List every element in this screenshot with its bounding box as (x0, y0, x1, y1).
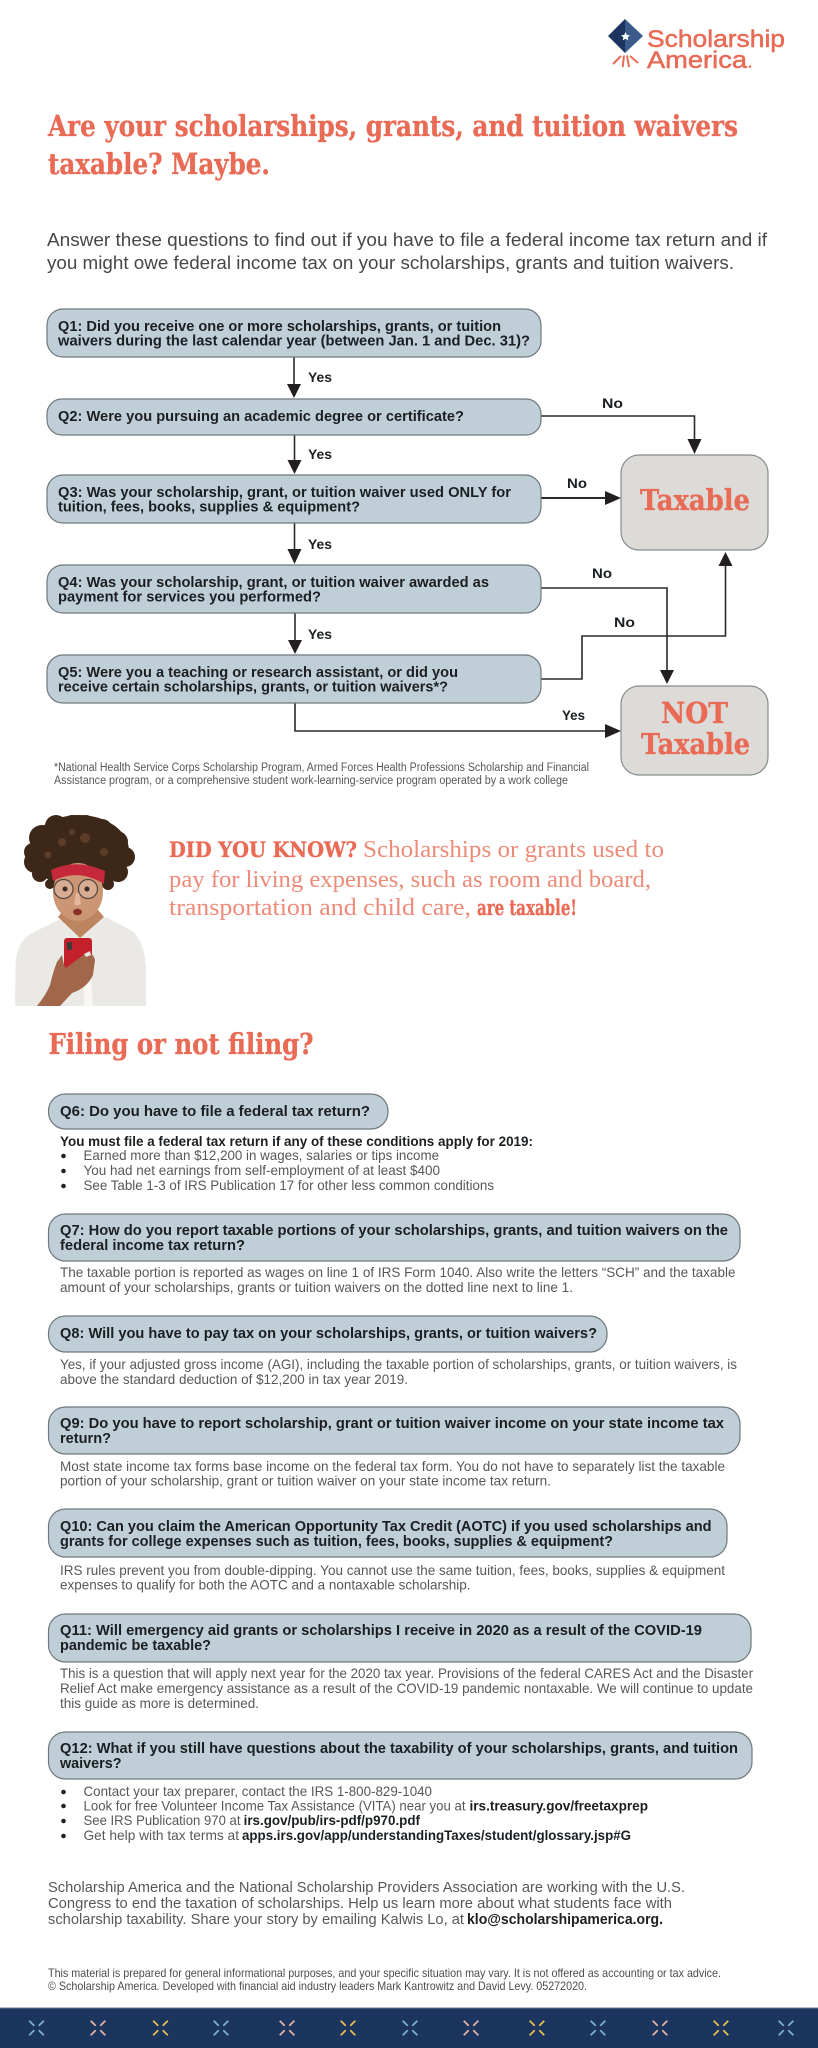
question pill Q10: grants for college expenses such as tuition, fees, books, supplies & equipment? (60, 1534, 613, 1550)
answer Q7: The taxable portion is reported as wages on line 1 of IRS Form 1040. Also write the letters “SCH” and the taxable (60, 1265, 736, 1280)
closing text block (48, 1879, 685, 1928)
result box: NOT Taxable: Taxable (641, 727, 750, 761)
disclaimer (48, 1966, 721, 1993)
question box Q4: payment for services you performed? (58, 590, 321, 606)
closing text block: scholarship taxability. Share your story by emailing Kalwis Lo, at (48, 1911, 465, 1928)
footnote: Assistance program, or a comprehensive student work-learning-service program operated by a work college (54, 775, 568, 787)
intro text: you might owe federal income tax on your scholarships, grants and tuition waivers. (47, 252, 734, 273)
neck (58, 910, 104, 938)
question pill Q7: federal income tax return? (60, 1238, 245, 1254)
panel: Q7 (48, 1214, 740, 1295)
connector: Q2 no to Taxable: No (602, 395, 623, 411)
panel: Q12 (48, 1732, 752, 1843)
title: taxable? Maybe. (48, 147, 270, 181)
answer Q7 (60, 1265, 736, 1295)
answer Q12 list: apps.irs.gov/app/understandingTaxes/student/glossary.jsp#G (242, 1828, 631, 1843)
question pill Q12: Q12: What if you still have questions about the taxability of your scholarships, grants, and tuition (60, 1741, 738, 1757)
question box Q5: receive certain scholarships, grants, or tuition waivers*? (58, 680, 448, 696)
disclaimer: © Scholarship America. Developed with financial aid industry leaders Mark Kantrowitz and David Levy. 05272020. (48, 1979, 587, 1993)
callout: did you know: transportation and child care, (169, 895, 471, 921)
answer Q11: This is a question that will apply next year for the 2020 tax year. Provisions of the federal CARES Act and the Disaster (60, 1666, 753, 1681)
answer Q6 (60, 1134, 533, 1193)
result box: Taxable (621, 455, 768, 550)
glasses (54, 880, 98, 898)
question pill Q9: Q9: Do you have to report scholarship, grant or tuition waiver income on your state income tax (60, 1416, 724, 1432)
connector: Q4 no to NOT Taxable: No (592, 565, 612, 581)
connector: Q1 yes to Q2: Yes (308, 369, 332, 385)
panel: Q11 (48, 1614, 753, 1711)
answer Q12 list (61, 1784, 648, 1843)
answer Q9: Most state income tax forms base income on the federal tax form. You do not have to separately list the taxable (60, 1459, 725, 1474)
connector: Q5 yes to NOT Taxable: Yes (562, 707, 585, 723)
hand (37, 953, 95, 1006)
panel: Q6 (48, 1094, 533, 1193)
hair (24, 815, 135, 890)
question pill Q6 (48, 1094, 388, 1129)
connector: Q3 no to Taxable: No (567, 475, 587, 491)
answer Q6: You had net earnings from self-employment of at least $400 (84, 1163, 440, 1178)
result box: Taxable: Taxable (640, 483, 750, 517)
question pill Q10 (48, 1509, 727, 1557)
answer Q7: amount of your scholarships, grants or tuition waivers on the dotted line next to line 1. (60, 1280, 573, 1295)
panel: Q9 (48, 1407, 740, 1488)
connector: Q4 yes to Q5 (288, 613, 332, 654)
logo: Scholarship America (608, 19, 785, 74)
connector: Q4 no to NOT Taxable (541, 565, 674, 684)
answer Q9: portion of your scholarship, grant or tuition waiver on your state income tax return. (60, 1474, 551, 1488)
answer Q6: Earned more than $12,200 in wages, salaries or tips income (84, 1148, 439, 1163)
answer Q11 (60, 1666, 753, 1711)
question pill Q10: Q10: Can you claim the American Opportunity Tax Credit (AOTC) if you used scholarships and (60, 1519, 712, 1535)
answer Q10: IRS rules prevent you from double-dipping. You cannot use the same tuition, fees, books, supplies & equipment (60, 1563, 725, 1578)
result box: NOT Taxable (621, 686, 768, 775)
footnote: *National Health Service Corps Scholarship Program, Armed Forces Health Professions Scholarship and Financial (54, 762, 589, 774)
question pill Q7: Q7: How do you report taxable portions of your scholarships, grants, and tuition waivers on the (60, 1223, 728, 1239)
answer Q12 list: Contact your tax preparer, contact the IRS 1-800-829-1040 (84, 1784, 432, 1799)
callout: did you know: are taxable! (477, 895, 577, 920)
question box Q4: Q4: Was your scholarship, grant, or tuition waiver awarded as (58, 575, 489, 591)
question pill Q8: Q8: Will you have to pay tax on your scholarships, grants, or tuition waivers? (60, 1326, 597, 1342)
question pill Q7 (48, 1214, 740, 1261)
title (47, 109, 738, 181)
question box Q3: tuition, fees, books, supplies & equipment? (58, 500, 360, 516)
answer Q12 list: Get help with tax terms at (84, 1828, 239, 1843)
question box Q3: Q3: Was your scholarship, grant, or tuition waiver used ONLY for (58, 485, 511, 501)
answer Q10: expenses to qualify for both the AOTC and a nontaxable scholarship. (60, 1578, 470, 1592)
question box Q1: waivers during the last calendar year (between Jan. 1 and Dec. 31)? (57, 334, 530, 350)
question box Q4 (47, 565, 541, 613)
logo: Scholarship America: Scholarship (647, 26, 785, 53)
answer Q12 list: irs.gov/pub/irs-pdf/p970.pdf (244, 1813, 420, 1828)
connector: Q3 yes to Q4 (288, 523, 332, 564)
result box: NOT Taxable: NOT (661, 696, 728, 730)
answer Q8 (60, 1357, 737, 1387)
question pill Q9: return? (60, 1431, 111, 1447)
heading: Filing or not filing: Filing or not filing? (48, 1027, 314, 1061)
phone (64, 938, 92, 970)
connector: Q5 no to Taxable: No (614, 614, 635, 630)
answer Q8: above the standard deduction of $12,200 in tax year 2019. (60, 1372, 408, 1387)
headband (51, 864, 105, 884)
connector: Q1 yes to Q2 (287, 357, 332, 398)
question pill Q11 (48, 1614, 751, 1662)
question pill Q11: pandemic be taxable? (60, 1638, 211, 1654)
answer Q12 list: Look for free Volunteer Income Tax Assistance (VITA) near you at (84, 1798, 466, 1814)
intro text: Answer these questions to find out if you have to file a federal income tax return and if (47, 229, 768, 250)
answer Q9 (60, 1459, 725, 1488)
connector: Q5 no to Taxable (541, 552, 732, 679)
footnote (54, 762, 589, 787)
connector: Q4 yes to Q5: Yes (308, 626, 332, 642)
connector: Q3 no to Taxable (541, 475, 621, 505)
question box Q1 (47, 309, 541, 357)
closing text block: Scholarship America and the National Scholarship Providers Association are working with the U.S. (48, 1879, 685, 1896)
connector: Q2 no to Taxable (541, 395, 702, 454)
question pill Q9 (48, 1407, 740, 1454)
connector: Q5 yes to NOT Taxable (295, 703, 621, 738)
question pill Q8 (48, 1316, 607, 1352)
question box Q2: Q2: Were you pursuing an academic degree or certificate? (58, 409, 464, 425)
question pill Q12: waivers? (59, 1756, 122, 1772)
callout: did you know: pay for living expenses, such as room and board, (169, 867, 651, 893)
callout: did you know (169, 837, 664, 921)
panel: Q10 (48, 1509, 727, 1592)
connector: Q2 yes to Q3: Yes (308, 446, 332, 462)
logo: Scholarship America: America (647, 47, 748, 74)
callout: did you know: DID YOU KNOW? (169, 837, 357, 862)
answer Q8: Yes, if your adjusted gross income (AGI), including the taxable portion of scholarships, grants, or tuition waivers, is (60, 1357, 737, 1372)
closing text block: klo@scholarshipamerica.org. (467, 1911, 663, 1928)
answer Q12 list: See IRS Publication 970 at (84, 1813, 241, 1828)
panel: Q8 (48, 1316, 737, 1387)
footer band with star-burst marks (0, 2008, 818, 2048)
question box Q2 (47, 399, 541, 435)
answer Q11: this guide as more is determined. (60, 1696, 259, 1711)
flowchart (47, 309, 768, 787)
answer Q6: You must file a federal tax return if any of these conditions apply for 2019: (60, 1134, 533, 1149)
disclaimer: This material is prepared for general informational purposes, and your specific situation may vary. It is not offered as accounting or tax advice. (48, 1966, 721, 1980)
answer Q6: See Table 1-3 of IRS Publication 17 for other less common conditions (84, 1178, 494, 1193)
question pill Q6: Q6: Do you have to file a federal tax return? (60, 1104, 370, 1120)
shirt (15, 917, 146, 1006)
callout: did you know: Scholarships or grants used to (363, 837, 664, 863)
connector: Q3 yes to Q4: Yes (308, 536, 332, 552)
answer Q11: Relief Act make emergency assistance as a result of the COVID-19 pandemic nontaxable. We will continue to update (60, 1681, 753, 1696)
question pill Q11: Q11: Will emergency aid grants or scholarships I receive in 2020 as a result of the COVID-19 (60, 1623, 702, 1639)
question box Q1: Q1: Did you receive one or more scholarships, grants, or tuition (58, 319, 501, 335)
answer Q12 list: irs.treasury.gov/freetaxprep (470, 1798, 648, 1814)
question box Q5: Q5: Were you a teaching or research assistant, or did you (58, 665, 458, 681)
closing text block: Congress to end the taxation of scholarships. Help us learn more about what students face with (48, 1895, 672, 1912)
photo illustration: woman looking at red phone (15, 815, 146, 1006)
answer Q10 (60, 1563, 725, 1592)
connector: Q2 yes to Q3 (288, 435, 332, 474)
question box Q3 (47, 475, 541, 523)
question pill Q12 (48, 1732, 752, 1779)
intro text (47, 229, 768, 273)
face (53, 863, 103, 921)
question box Q5 (47, 655, 541, 703)
